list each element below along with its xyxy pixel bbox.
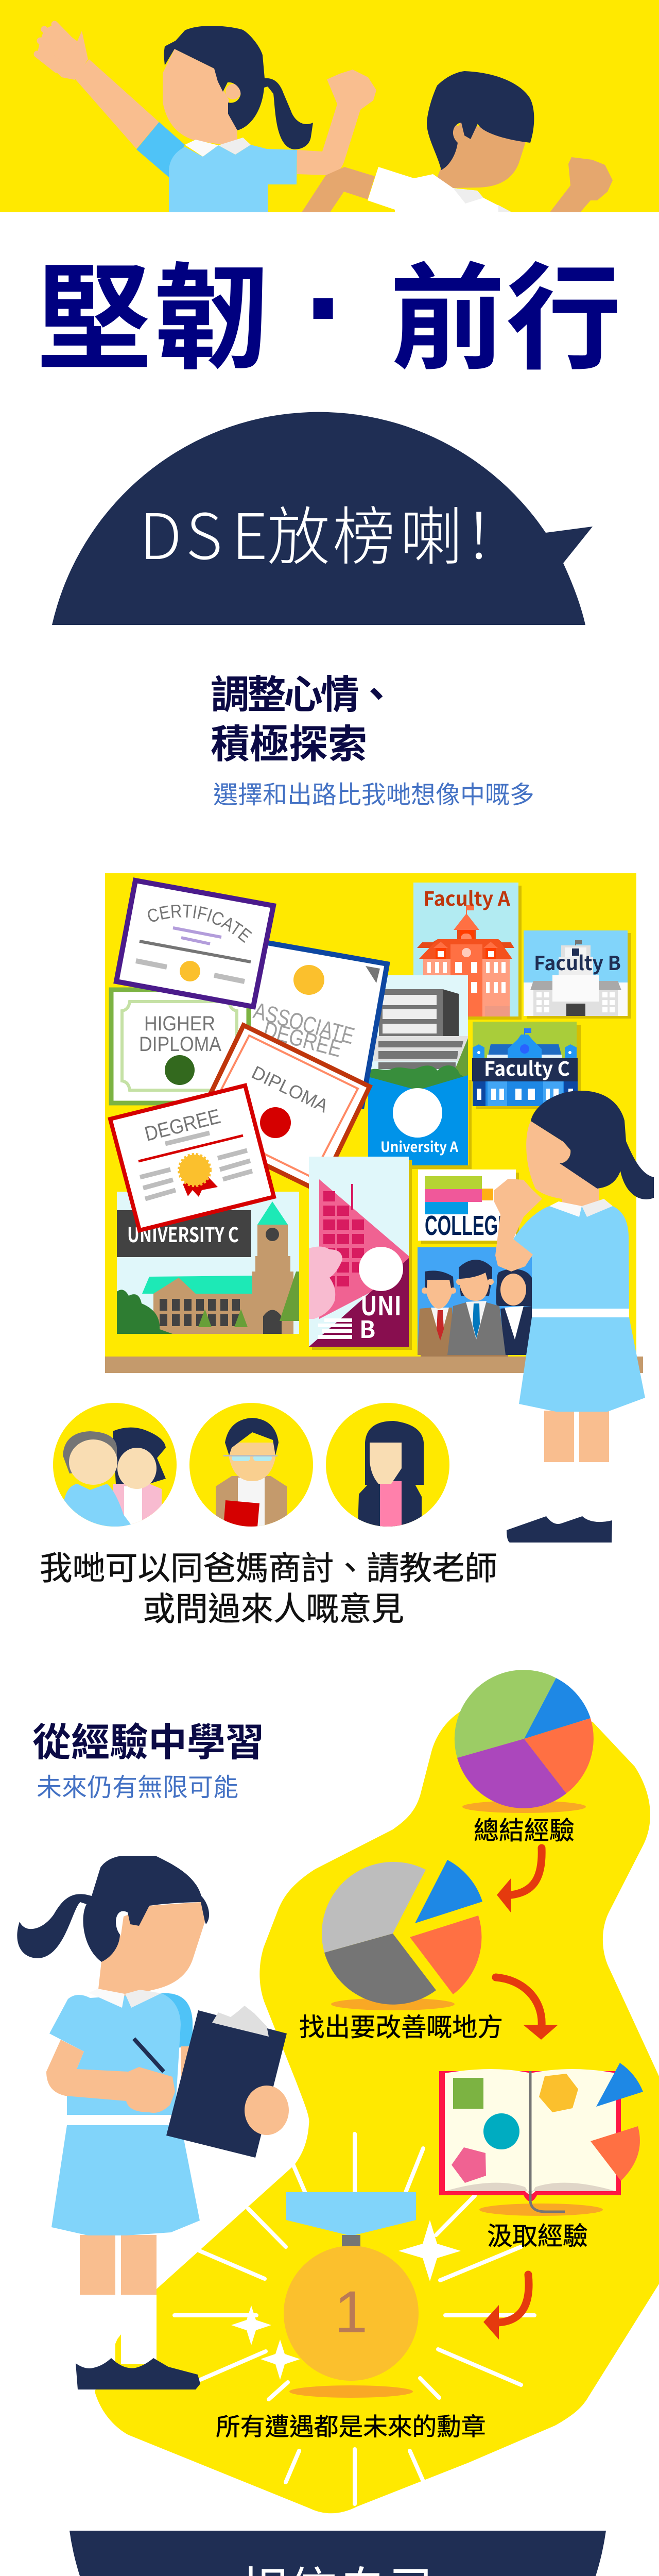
- subheading: 選擇和出路比我哋想像中嘅多: [213, 774, 534, 810]
- pie chart: summarize experience: [455, 1670, 594, 1813]
- arm and hand: [494, 1179, 542, 1272]
- neck and face: [98, 1902, 205, 1999]
- poster: Faculty A: [413, 883, 522, 1020]
- title: 前行: [390, 225, 621, 393]
- poster: Faculty B: [524, 930, 631, 1019]
- poster: Faculty C: Faculty C: [484, 1053, 570, 1081]
- dress right sleeve: [162, 1993, 193, 2048]
- title: ·: [304, 230, 350, 385]
- collar: [89, 1989, 161, 2008]
- heading: adjust mindset: 積極探索: [211, 713, 367, 769]
- icon: teacher: [189, 1403, 313, 1529]
- poster: University C: UNIVERSITY C: [127, 1218, 239, 1248]
- clipboard: [166, 2010, 287, 2158]
- rays around medal: [175, 2134, 534, 2504]
- certificate: higher diploma: [111, 990, 249, 1103]
- medal: [284, 2192, 419, 2398]
- poster: Faculty A: Faculty A: [423, 883, 511, 911]
- poster: College: [418, 1170, 519, 1244]
- certificate: certificate: [113, 877, 276, 1010]
- text: ask parents, teachers, seniors: [40, 1542, 497, 1630]
- boy face: [437, 122, 527, 188]
- girl dress: [169, 145, 297, 212]
- certificate: diploma: [193, 1025, 370, 1191]
- pie chart: find improvements: [322, 1860, 482, 2010]
- boy arm behind: [302, 167, 375, 212]
- girl raised arm: [37, 24, 159, 149]
- label: medal: 所有遭遇都是未來的勳章: [216, 2407, 486, 2443]
- title: 堅韌: [37, 225, 269, 393]
- bowl: believe in yourself: [70, 2531, 606, 2576]
- text: ask parents, teachers, seniors: 我哋可以同爸媽商討、請教老師: [40, 1542, 497, 1589]
- poster: Faculty C: [472, 1022, 581, 1109]
- girl with clipboard: [17, 1856, 289, 2389]
- hair: [531, 1091, 654, 1199]
- subheading: 未來仍有無限可能: [37, 1767, 238, 1804]
- label: summarize: 總結經驗: [474, 1810, 575, 1847]
- certificate: associate degree: ASSOCIATE: [251, 997, 357, 1049]
- girl looking at options: [494, 1091, 654, 1543]
- shoes: [507, 1516, 612, 1543]
- girl face: [163, 49, 237, 147]
- certificate: degree: [110, 1086, 274, 1230]
- boy hair: [427, 71, 534, 170]
- header illustration: two students cheering: [0, 0, 659, 212]
- speech bubble: DSE results: [52, 412, 593, 625]
- poster: University A: [368, 975, 472, 1169]
- certificate: higher diploma: DIPLOMA: [139, 1033, 221, 1056]
- boy shirt: [368, 167, 512, 212]
- arrow 1: [497, 1848, 542, 1913]
- shelf: [105, 1357, 643, 1373]
- boy fist and arm: [550, 157, 613, 212]
- book: absorb experience: [439, 2063, 643, 2216]
- clipboard clip: [212, 2006, 269, 2037]
- certificate: associate degree: [210, 937, 387, 1106]
- dress: [49, 1993, 200, 2235]
- poster: College: COLLEGE: [425, 1210, 510, 1241]
- sparkles: [231, 2220, 461, 2380]
- poster: University A: University A: [380, 1136, 459, 1157]
- neck: [562, 1182, 599, 1208]
- girl other arm and fist: [297, 70, 376, 175]
- poster: Faculty B: Faculty B: [534, 947, 621, 976]
- poster: University B: B: [359, 1311, 375, 1345]
- collar: [549, 1199, 613, 1217]
- text: ask parents, teachers, seniors: 或問過來人嘅意見: [143, 1583, 404, 1630]
- arrow 3: [483, 2275, 529, 2340]
- certificate: degree: DEGREE: [143, 1105, 223, 1146]
- poster: graduates: [418, 1247, 532, 1357]
- arrow 2: [496, 1977, 558, 2040]
- medal: 1: [335, 2279, 368, 2345]
- title: [37, 225, 621, 393]
- heading: adjust mindset: [211, 663, 396, 769]
- certificate: diploma: DIPLOMA: [248, 1061, 332, 1116]
- left arm: [46, 2040, 175, 2113]
- certificate: associate degree: DEGREE: [261, 1016, 344, 1062]
- icon: senior student: [326, 1403, 449, 1528]
- heading: learn from experience: 從經驗中學習: [32, 1711, 264, 1767]
- legs: [80, 2235, 157, 2364]
- girl hair and ponytail: [164, 26, 313, 149]
- heading: adjust mindset: 調整心情、: [211, 663, 396, 720]
- hair and ponytail: [17, 1856, 209, 1962]
- poster: University B: [309, 1157, 412, 1350]
- legs: [544, 1411, 609, 1521]
- bubble text: DSE放榜喇！: [140, 486, 510, 578]
- poster: University B: UNI: [360, 1286, 402, 1323]
- poster: University C: [117, 1192, 299, 1334]
- label: absorb experience: 汲取經驗: [487, 2216, 588, 2252]
- certificate: higher diploma: HIGHER: [144, 1012, 215, 1035]
- label: find improvements: 找出要改善嘅地方: [299, 2007, 503, 2044]
- icon: parents: [53, 1403, 177, 1528]
- belt: [67, 2115, 172, 2125]
- dress: [513, 1206, 645, 1412]
- person middle: [447, 1260, 506, 1355]
- belt: [532, 1309, 629, 1317]
- yellow blob background: [95, 1711, 659, 2513]
- girl sleeve: [136, 122, 185, 177]
- right arm: [181, 2046, 190, 2076]
- girl collar: [185, 138, 251, 157]
- person right: [496, 1269, 532, 1355]
- shoes: [76, 2358, 200, 2389]
- pencil: [134, 2039, 164, 2072]
- person left: [418, 1270, 456, 1355]
- right hand: [245, 2086, 289, 2135]
- face: [526, 1121, 599, 1200]
- certificate: certificate: CERTIFICATE: [148, 905, 252, 943]
- panel: option board: [105, 873, 643, 1373]
